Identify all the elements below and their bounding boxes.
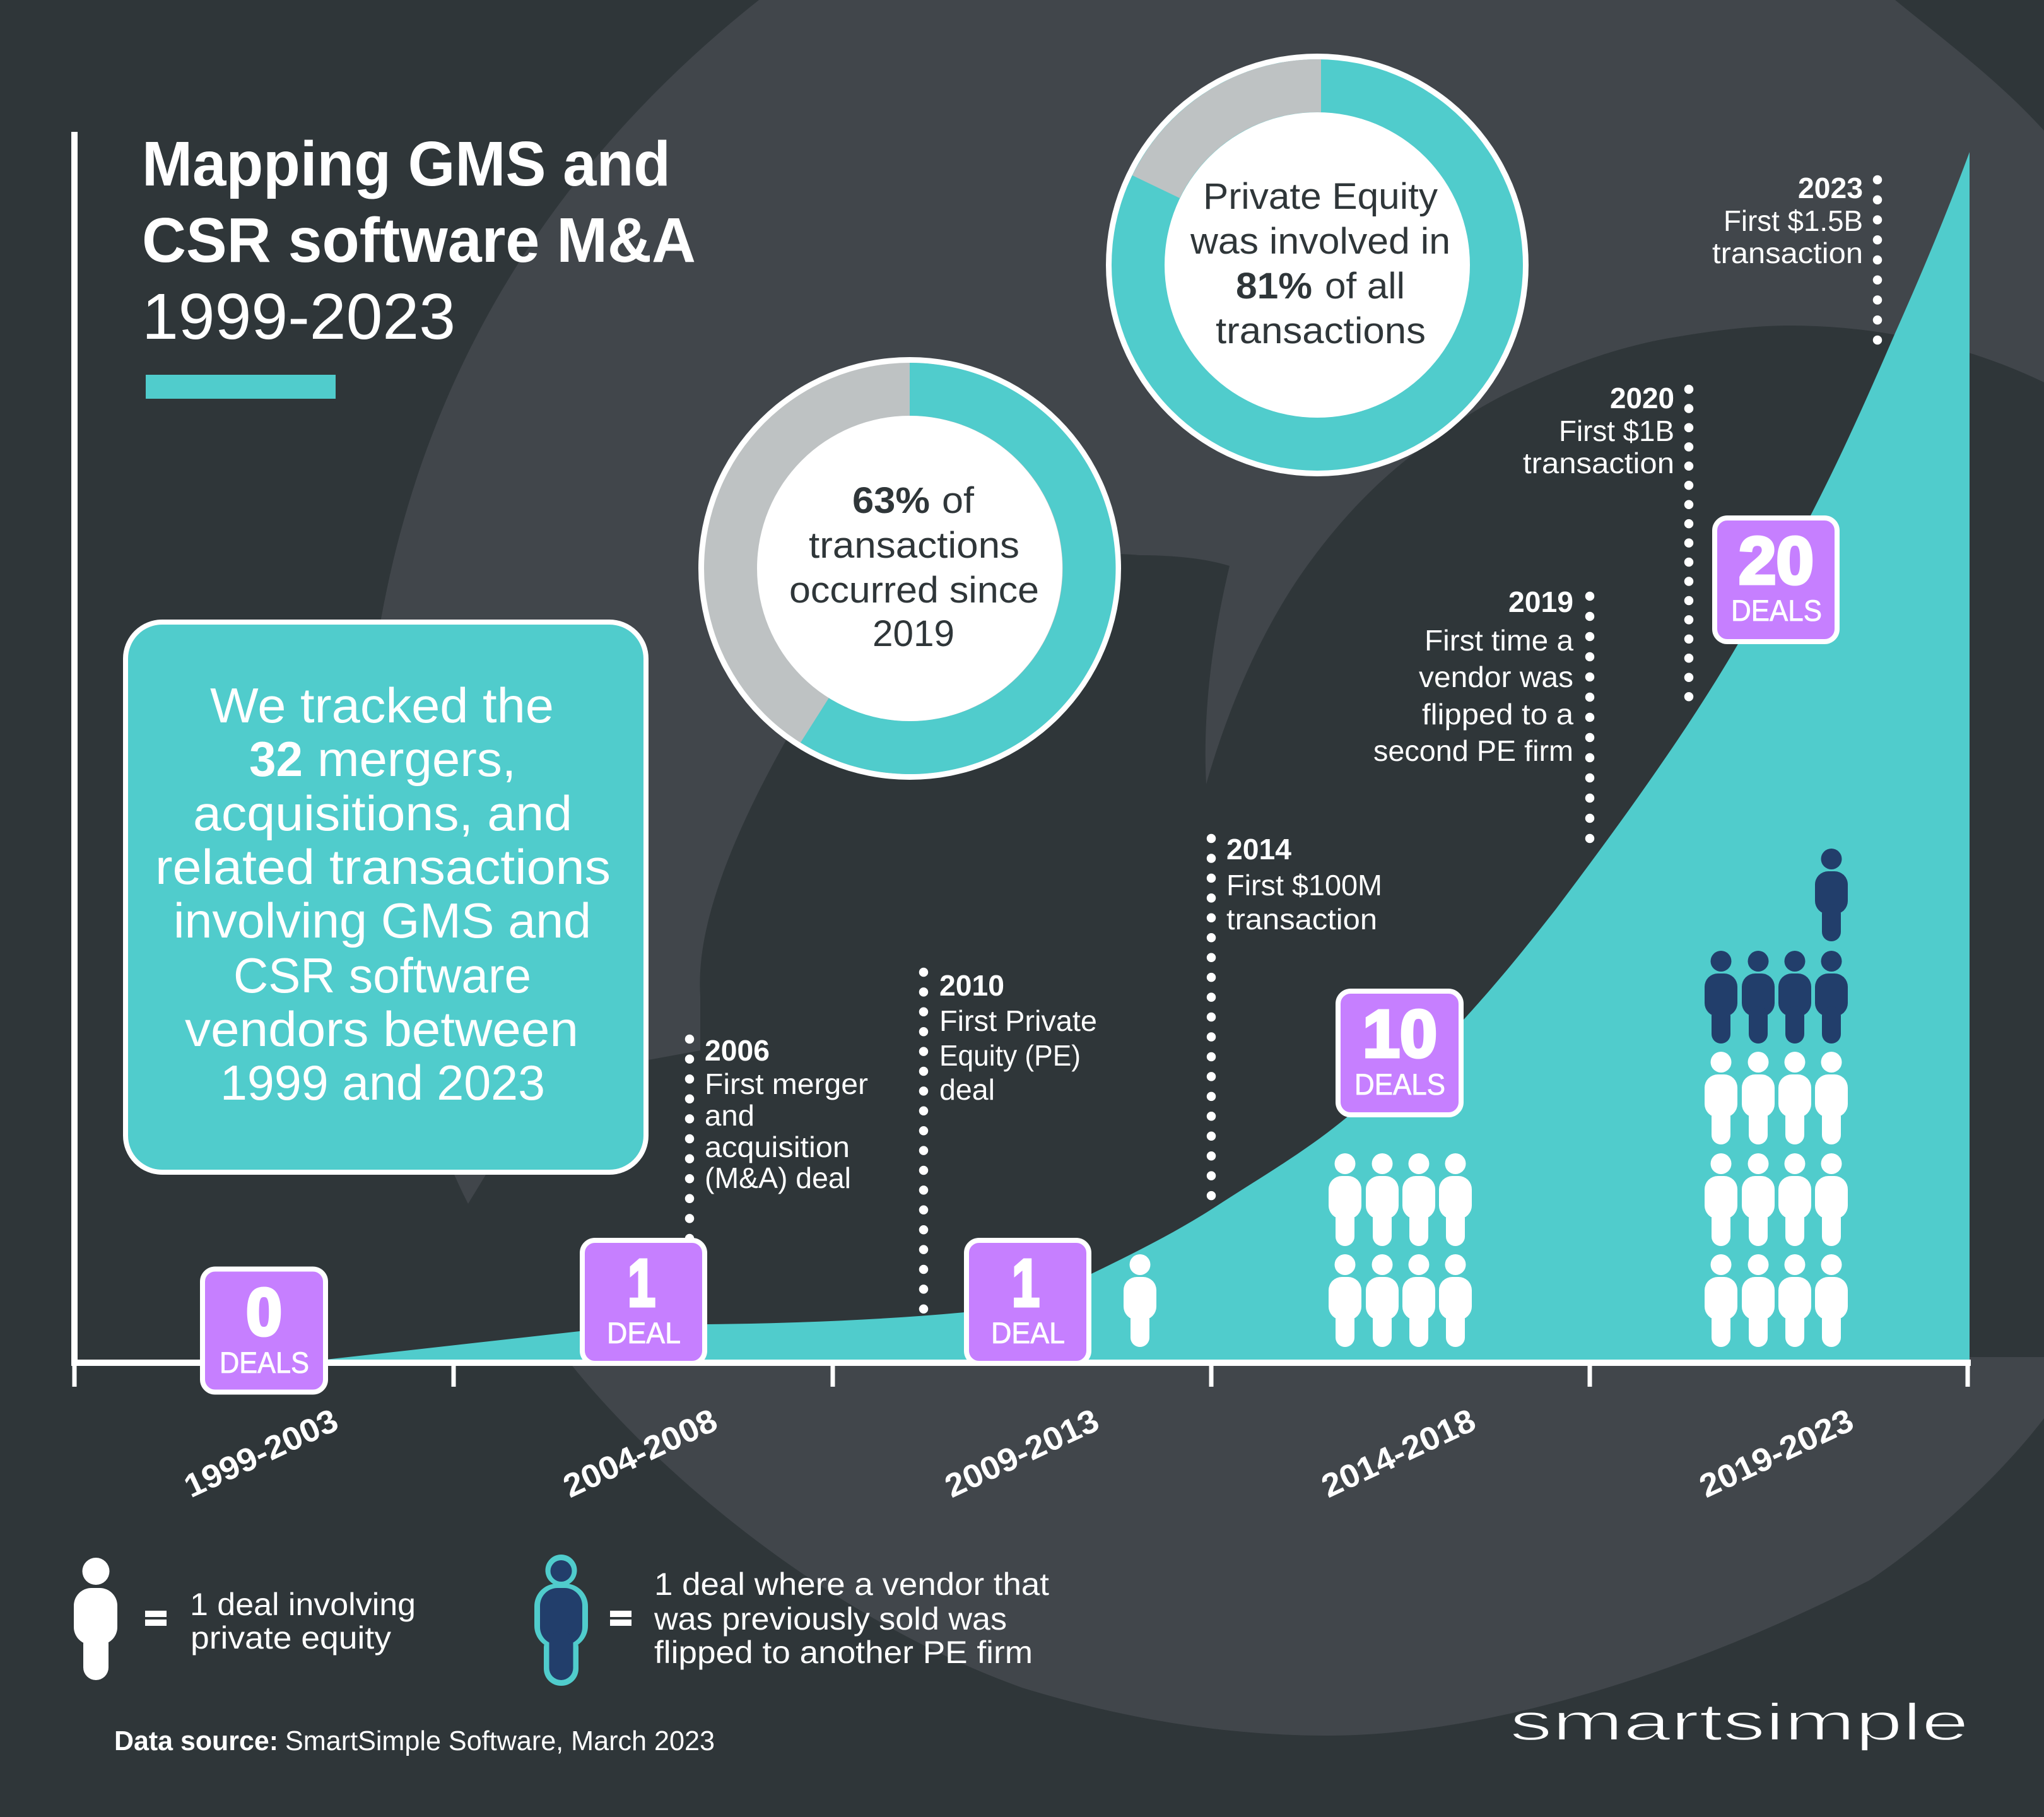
badge: 0 deals [203,1269,326,1392]
donut chart: 81% private equity: Private Equity [1203,176,1438,217]
pictogram: 2014-2018 deals [1329,1153,1472,1347]
milestone 2014: First $100M [1226,869,1382,902]
legend: flipped vendor deal: was previously sold was [654,1601,1007,1637]
panel: intro callout: We tracked the [210,678,554,733]
background swirl: upper light shape [375,0,2044,1204]
donut chart: 81% private equity: of all [1325,266,1405,307]
badge: 10 deals: 10 [1363,997,1437,1071]
badge: 10 deals: DEALS [1354,1067,1445,1101]
legend: flipped vendor deal [534,1555,1049,1686]
milestone 2020 [1523,382,1689,698]
axis labels: 2019-2023 [1694,1402,1859,1505]
axis labels: 2004-2008 [558,1402,723,1505]
milestone 2006: acquisition [705,1131,850,1163]
legend: private equity deal: 1 deal involving [190,1587,416,1622]
milestone 2010: deal [939,1073,995,1106]
donut chart: 63% since 2019: 2019 [872,613,954,654]
axis labels [179,1402,1859,1505]
title accent bar [146,375,336,399]
milestone 2020: transaction [1523,447,1674,479]
panel: intro callout: 1999 and 2023 [220,1055,545,1110]
badge: 0 deals: 0 [246,1275,282,1350]
panel: intro callout: 32 [249,731,303,787]
milestone 2010: Equity (PE) [939,1039,1081,1072]
background swirl: inner dark shape [700,326,2044,1363]
badge: 0 deals: DEALS [220,1346,309,1379]
panel: intro callout: mergers, [317,731,516,787]
milestone 2019 [1373,585,1590,840]
legend: private equity deal: private equity [191,1620,391,1655]
badge: 1 deal 2004-2008: 1 [628,1246,655,1320]
badge: 20 deals: DEALS [1731,594,1822,627]
axis labels: 1999-2003 [179,1402,344,1505]
badge: 1 deal 2009-2013: DEAL [991,1316,1065,1350]
donut chart: 63% since 2019: transactions [809,525,1019,566]
milestone 2019: second PE firm [1373,734,1573,767]
pictogram: 2019-2023 private equity deals [1705,1052,1848,1347]
panel: intro callout: acquisitions, and [193,785,572,841]
title: CSR software M&A [142,205,696,276]
milestone 2020: 2020 [1610,382,1674,415]
milestone 2006: and [705,1099,755,1132]
milestone 2006: First merger [705,1067,868,1100]
donut chart: 63% since 2019: of [942,480,975,521]
panel: intro callout [126,622,646,1172]
donut chart: 81% private equity: was involved in [1190,221,1450,262]
badge: 1 deal 2009-2013: 1 [1012,1246,1040,1320]
milestone 2014: 2014 [1226,833,1291,866]
title: Mapping GMS and [142,129,671,199]
milestone 2010: First Private [939,1004,1097,1037]
milestone 2006: (M&A) deal [705,1161,851,1194]
milestone 2019: 2019 [1508,585,1573,618]
badge: 1 deal 2004-2008: DEAL [607,1316,681,1350]
legend: private equity deal [74,1558,416,1680]
title: 1999-2023 [142,280,455,353]
donut chart: 63% since 2019 [698,357,1121,780]
chart: deals area curve [326,152,1970,1360]
milestone 2019: flipped to a [1422,698,1573,731]
milestone 2023 [1712,172,1877,341]
chart axes [71,132,1971,1387]
milestone 2010: 2010 [939,969,1004,1002]
legend: flipped vendor deal: flipped to another PE firm [654,1635,1033,1670]
milestone 2006: 2006 [705,1034,770,1067]
milestone 2014: transaction [1226,903,1377,936]
milestone 2010 [924,969,1097,1310]
donut chart: 63% since 2019: occurred since [789,570,1039,611]
panel: intro callout: involving GMS and [173,893,591,948]
title [142,129,696,353]
badge: 10 deals [1338,991,1461,1115]
donut chart: 81% private equity: transactions [1216,310,1426,351]
milestone 2023: First $1.5B [1724,204,1863,237]
legend: flipped vendor deal: 1 deal where a vendor that [654,1567,1049,1602]
axis labels: 2009-2013 [939,1402,1105,1505]
milestone 2014 [1211,833,1382,1197]
milestone 2023: 2023 [1798,172,1863,204]
badge: 1 deal 2004-2008 [582,1240,705,1363]
donut chart: 63% since 2019: 63% [852,480,930,521]
logo: smartsimple: smartsimple [1510,1693,1969,1751]
donut chart: 81% private equity [1106,54,1529,476]
axis labels: 2014-2018 [1316,1402,1481,1505]
pictogram: 2009-2013 deal [1124,1254,1156,1347]
badge: 1 deal 2009-2013 [966,1240,1089,1363]
milestone 2019: vendor was [1419,661,1573,693]
milestone 2023: transaction [1712,237,1863,269]
data source: Data source: [114,1726,278,1756]
pictogram: 2019-2023 flipped deals [1705,849,1848,1044]
badge: 20 deals [1715,518,1837,642]
milestone 2020: First $1B [1559,415,1674,447]
milestone 2019: First time a [1424,624,1573,657]
donut chart: 81% private equity: 81% [1236,266,1312,307]
background swirl: lower light shape [570,1357,2044,1736]
milestone 2006 [690,1034,868,1240]
badge: 20 deals: 20 [1739,524,1814,598]
panel: intro callout: related transactions [155,839,611,895]
panel: intro callout: CSR software [233,948,531,1003]
panel: intro callout: vendors between [185,1001,579,1057]
data source: SmartSimple Software, March 2023 [285,1726,715,1756]
